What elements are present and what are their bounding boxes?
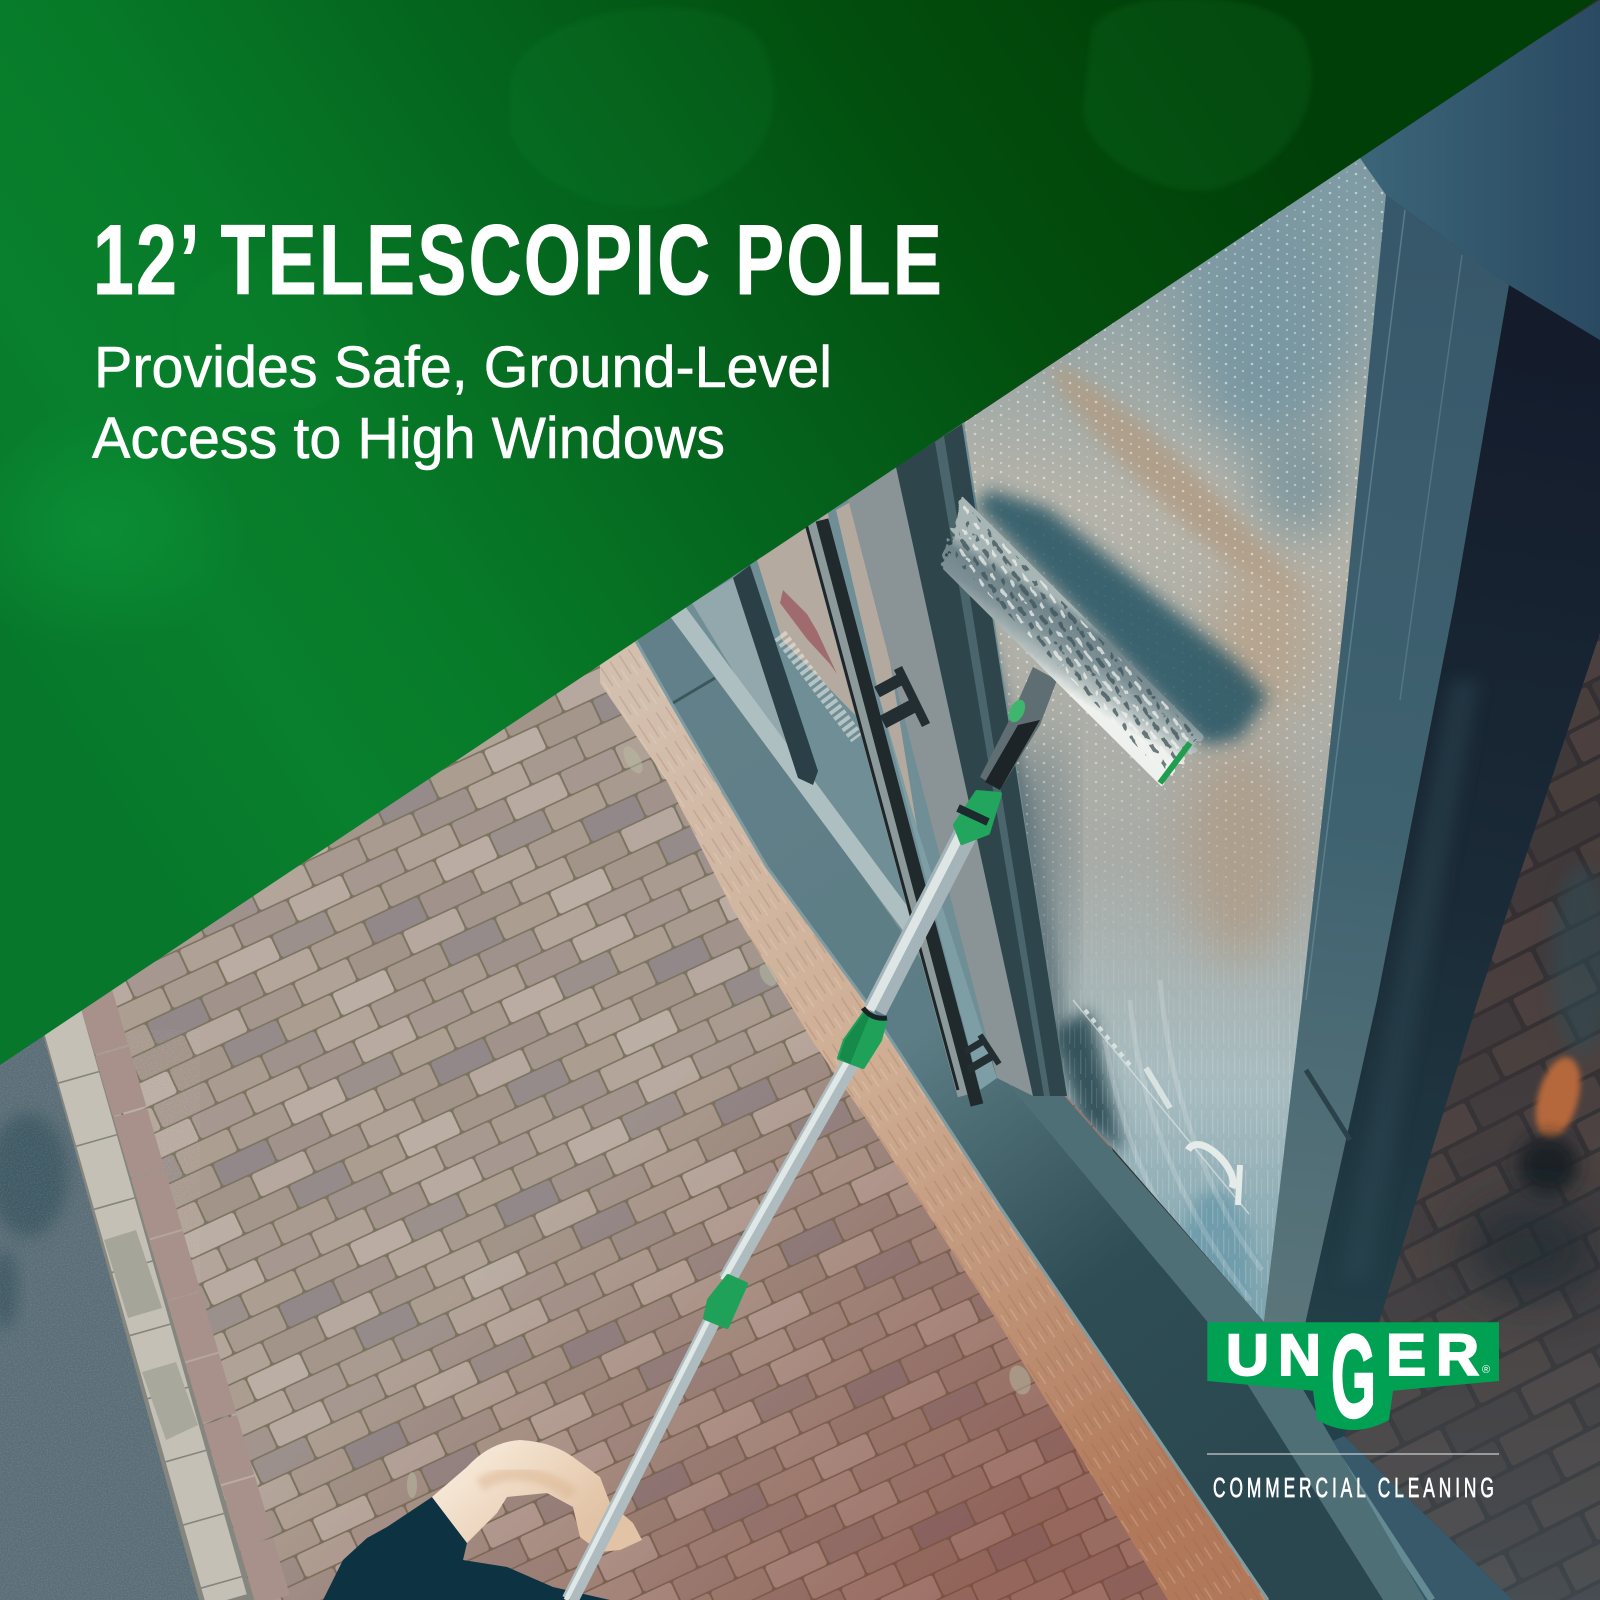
logo letter N: N <box>1278 1323 1321 1388</box>
grey door panel <box>848 467 1033 1096</box>
hinge top <box>877 668 926 725</box>
pole upper highlight <box>870 835 960 1010</box>
frame mid stripe <box>935 436 1050 1096</box>
logo letter U: U <box>1226 1323 1269 1388</box>
frame highlight band <box>1340 680 1480 1280</box>
stone sill <box>636 611 1383 1600</box>
green diagonal panel <box>0 0 1597 1065</box>
window decal marks <box>1073 1000 1249 1214</box>
sill pale edge <box>636 641 1268 1600</box>
door glass reflection <box>836 495 917 828</box>
door frame strip <box>812 520 966 1095</box>
pole lower section <box>570 1305 720 1600</box>
soldier course of bricks <box>94 990 273 1600</box>
squeegee shadow <box>975 490 1268 745</box>
pale reflection <box>757 513 860 720</box>
dark window frame <box>896 424 1067 1096</box>
brick wall strip <box>600 641 1268 1600</box>
registered mark: ® <box>1482 1364 1490 1376</box>
reflected brick in right window <box>1344 633 1600 1600</box>
middle collar <box>839 1008 887 1067</box>
bokeh shape left <box>510 7 774 208</box>
logo divider <box>1207 1453 1499 1455</box>
squeegee pad <box>942 497 1205 785</box>
pale sill edge <box>678 612 936 960</box>
subtitle line 1: Provides Safe, Ground-Level <box>94 335 832 400</box>
white lettering <box>780 635 857 738</box>
squeegee handle <box>980 667 1057 790</box>
pole middle section <box>727 1060 852 1280</box>
upper left window pane <box>692 578 798 778</box>
door frame black thick <box>822 520 977 1105</box>
door wall base <box>680 422 1067 1096</box>
hinge bottom <box>965 1035 999 1070</box>
pole upper section <box>875 835 965 1010</box>
weeds <box>407 744 1035 1498</box>
bright glow <box>0 410 245 650</box>
pale reflection line <box>1340 1460 1432 1600</box>
door lower teal <box>880 700 997 1090</box>
window post <box>733 565 818 785</box>
sill notch <box>673 678 715 703</box>
person: arm and hand <box>432 1440 642 1552</box>
tagline: commercial cleaning: COMMERCIAL CLEANING <box>1213 1472 1494 1503</box>
bokeh shape centre <box>177 255 367 415</box>
swirl <box>1105 980 1262 1320</box>
logo: Unger <box>1207 1311 1499 1443</box>
overhang <box>1355 0 1600 340</box>
logo: Unger: G <box>1331 1311 1376 1443</box>
lower frame strip <box>1010 1085 1425 1600</box>
base of window frame <box>1256 1322 1513 1600</box>
upper collar <box>955 792 1000 843</box>
paving bricks <box>0 400 1300 1600</box>
large window glass <box>960 150 1390 1350</box>
red mark <box>780 590 837 674</box>
door frame black thin <box>805 520 958 1090</box>
left windows and door <box>678 422 1067 1105</box>
grey window post <box>1256 195 1509 1463</box>
pole lower highlight <box>566 1305 716 1600</box>
telescopic pole <box>566 792 1000 1600</box>
subtitle line 2: Access to High Windows <box>92 406 725 471</box>
person: shirt <box>323 1497 610 1600</box>
curb stones <box>42 1000 254 1600</box>
title: 12’ TELESCOPIC POLE <box>93 205 942 316</box>
lower collar <box>705 1276 746 1327</box>
road asphalt <box>0 1030 200 1600</box>
logo letter R: R <box>1436 1323 1479 1388</box>
window frame dark <box>1283 285 1600 1463</box>
bokeh shape right <box>1083 0 1312 190</box>
pole middle highlight <box>723 1060 848 1280</box>
logo letter E: E <box>1386 1323 1426 1388</box>
